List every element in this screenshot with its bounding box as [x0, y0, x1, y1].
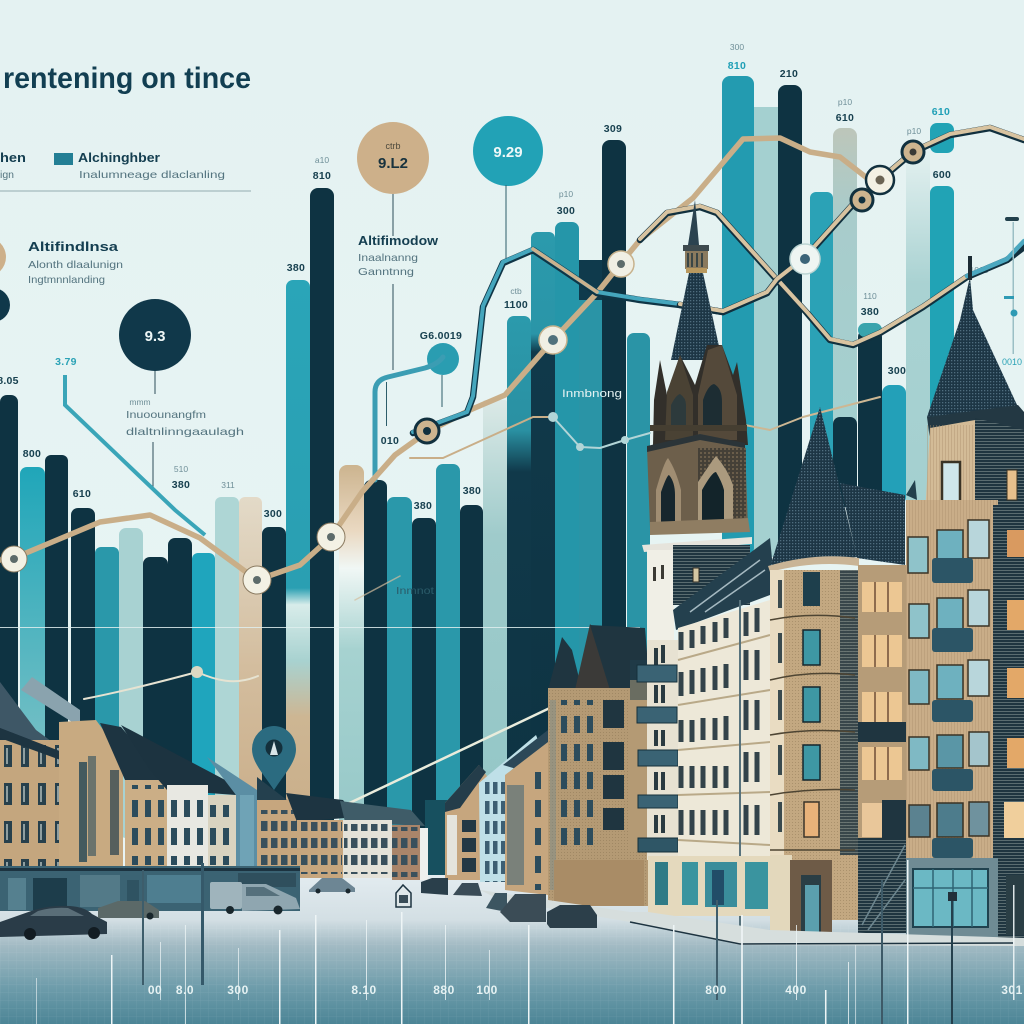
- in-chart small labels: Inmnot: [396, 586, 434, 597]
- callout: tan circle 9.L2: [357, 122, 439, 370]
- bar value labels: 311: [221, 480, 235, 490]
- x axis labels: 8.10: [351, 983, 377, 997]
- bar value labels: 510: [174, 464, 188, 474]
- bar value labels: 300: [557, 205, 575, 217]
- annotation: left text block: [28, 239, 123, 286]
- title: rentening on tince: [3, 62, 251, 95]
- line nodes: [1, 141, 924, 594]
- callout: tan circle 9.L2: 9.L2: [378, 155, 408, 172]
- callout: tan circle 9.L2: Ganntnng: [358, 266, 414, 278]
- faint line nodes: [191, 412, 629, 678]
- bar value labels: 810: [728, 60, 746, 72]
- line chart: wavy series: [0, 127, 1024, 580]
- callout: dark circle 9.3: dlaltnlinngaaulagh: [126, 426, 244, 438]
- bar value labels: 610: [836, 112, 854, 124]
- bar value labels: 610: [932, 106, 950, 118]
- annotation: left text block: Alonth dlaalunign: [28, 259, 123, 271]
- bar value labels: 380: [287, 262, 305, 274]
- callout: dark circle 9.3: mmm: [129, 397, 151, 407]
- bar value labels: ctb: [510, 286, 522, 296]
- teal marker with label: [386, 330, 462, 426]
- buildings: left street block: [0, 677, 428, 911]
- legend: ign: [0, 169, 14, 181]
- bar value labels: 380: [463, 485, 481, 497]
- faint trend lines: [84, 397, 880, 808]
- buildings: mid cluster: [445, 624, 650, 906]
- callout: dark circle 9.3: 9.3: [145, 328, 165, 345]
- bar value labels: 300: [730, 42, 744, 52]
- x axis labels: [148, 983, 1023, 997]
- in-chart small labels: Inmbnong: [562, 388, 622, 400]
- in-chart small labels: [396, 388, 622, 597]
- right corner tower: [906, 256, 1024, 940]
- legend: hen: [0, 150, 26, 165]
- church tower: [642, 200, 752, 640]
- cropped tan and dark circles at left edge: [0, 237, 10, 322]
- x axis labels: 400: [785, 983, 807, 997]
- glowing windows and stair column: [858, 565, 906, 933]
- bar value labels: p10: [559, 189, 573, 199]
- blue connector to marker: [375, 357, 443, 480]
- apartment block with balconies: [630, 538, 775, 930]
- callout: tan circle 9.L2: Altifimodow: [358, 233, 439, 248]
- bar value labels: p10: [907, 126, 921, 136]
- callout: teal circle 9.29: 9.29: [493, 144, 523, 161]
- right edge indicator: 0010: [1002, 357, 1022, 367]
- x axis labels: 880: [433, 983, 455, 997]
- bar value labels: p10: [838, 97, 852, 107]
- callout: dark circle 9.3: Inuoounangfm: [126, 409, 206, 421]
- icon: map pin: [252, 726, 296, 790]
- callout: teal circle 9.29: [473, 116, 543, 261]
- bar value labels: 010: [381, 435, 399, 447]
- bar value labels: 380: [861, 306, 879, 318]
- bar value labels: 800: [23, 448, 41, 460]
- bar value labels: [0, 42, 989, 520]
- bar value labels: 380: [172, 479, 190, 491]
- ground and street: [0, 875, 1024, 1024]
- bar value labels: 600: [933, 169, 951, 181]
- callout: tan circle 9.L2: Inaalnanng: [358, 252, 418, 264]
- bar value labels: 309: [604, 123, 622, 135]
- callout: tan circle 9.L2: ctrb: [385, 141, 401, 151]
- right edge indicator: [1002, 217, 1022, 367]
- x axis labels: 8.0: [176, 983, 194, 997]
- x axis labels: 100: [476, 983, 498, 997]
- annotation: left text block: Ingtmnnlanding: [28, 274, 105, 286]
- bar value labels: 610: [73, 488, 91, 500]
- bar chart: [0, 76, 954, 878]
- cars: [0, 878, 597, 940]
- sidewalk: [480, 890, 1024, 946]
- x axis labels: 00: [148, 983, 162, 997]
- bar value labels: 380: [414, 500, 432, 512]
- x axis labels: 301: [1001, 983, 1023, 997]
- legend: [0, 150, 251, 192]
- bar value labels: a10: [315, 155, 329, 165]
- icon: house marker on street: [396, 885, 411, 907]
- x axis labels: 800: [705, 983, 727, 997]
- teal faded line upper left: [65, 375, 205, 535]
- bar value labels: 3.79: [55, 356, 77, 368]
- bar value labels: 300: [888, 365, 906, 377]
- legend: Inalumneage dlaclanling: [79, 169, 225, 181]
- bar value labels: 210: [780, 68, 798, 80]
- round corner tower with conical roof: [768, 407, 905, 933]
- bar value labels: 1010: [970, 265, 989, 275]
- callout: dark circle 9.3: [119, 299, 244, 488]
- street poles and gridlines: [36, 860, 1014, 1024]
- bar value labels: 810: [313, 170, 331, 182]
- bar value labels: 1100: [504, 299, 528, 311]
- horizontal reference line: [0, 627, 640, 628]
- teal marker with label: G6.0019: [420, 330, 462, 342]
- bar value labels: 300: [264, 508, 282, 520]
- bar value labels: 110: [863, 291, 877, 301]
- legend: Alchinghber: [78, 150, 160, 165]
- annotation: left text block: Altifindlnsa: [28, 239, 119, 254]
- x axis labels: 300: [227, 983, 249, 997]
